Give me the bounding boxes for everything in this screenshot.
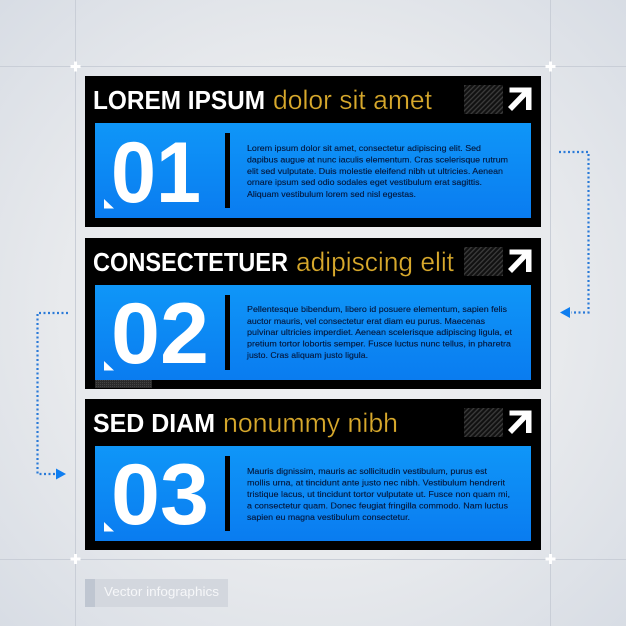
panel 3 heading bbox=[93, 408, 398, 438]
panel 1 body text: Lorem ipsum dolor sit amet, consectetur adipiscing elit. Sed bbox=[247, 143, 481, 153]
panel 1 arrow icon bbox=[508, 88, 532, 111]
panel 2 heading bbox=[93, 247, 455, 277]
panel 2 hatch block bbox=[464, 247, 503, 276]
panel 1 body text: ornare ipsum sed odio sodales eget vestibulum erat sagittis. bbox=[247, 177, 482, 187]
panel 3 body text: mollis urna, at tincidunt ante justo nec nibh. Vestibulum hendrerit bbox=[247, 478, 506, 488]
panel 3 bbox=[85, 399, 541, 550]
panel 2 body text: justo. Cras aliquam justo ligula. bbox=[246, 350, 368, 360]
panel 3 body text: Mauris dignissim, mauris ac sollicitudin vestibulum, purus est bbox=[247, 466, 488, 476]
panel 3 arrow icon bbox=[508, 410, 532, 434]
panel 1 body text bbox=[247, 143, 508, 199]
crop marks bbox=[70, 62, 556, 564]
panel 2 body text bbox=[246, 304, 513, 360]
arrow: dotted connector left bbox=[38, 313, 68, 480]
panel 1 heading bbox=[93, 85, 433, 115]
panel 2 heading: CONSECTETUER bbox=[93, 247, 288, 277]
panel 3 heading: nonummy nibh bbox=[223, 408, 398, 438]
caption label: Vector infographics bbox=[104, 584, 220, 599]
panel 3 heading: SED DIAM bbox=[93, 408, 215, 438]
panel 3 body text: a consectetur quam. Donec feugiat fringilla commodo. Nam luctus bbox=[247, 500, 509, 510]
panel 1 heading: LOREM IPSUM bbox=[93, 85, 265, 115]
panel 3 corner triangle bbox=[104, 522, 114, 532]
panel 3 divider bbox=[225, 456, 230, 531]
panel 2 body text: pulvinar ultricies imperdiet. Aenean scelerisque adipiscing ligula, et bbox=[247, 327, 513, 337]
panel 1 blue box bbox=[95, 123, 531, 218]
panel 2 body text: auctor mauris, vel consectetur erat diam eu purus. Maecenas bbox=[247, 316, 486, 326]
panel 1 corner triangle bbox=[104, 199, 114, 208]
panel 2 arrow icon bbox=[508, 250, 532, 273]
panel 1 number: 01 bbox=[111, 125, 201, 221]
panel 3 number: 03 bbox=[111, 447, 209, 543]
panel 2 bottom hatch strip bbox=[95, 380, 152, 388]
panel 1 body text: Aliquam vestibulum lorem sed nisl egestas. bbox=[247, 189, 416, 199]
panel 3 hatch block bbox=[464, 408, 503, 437]
panel 2 heading: adipiscing elit bbox=[296, 247, 455, 277]
panel 1 divider bbox=[225, 133, 230, 208]
panel 1 body text: dapibus augue at nunc iaculis elementum. Cras scelerisque rutrum bbox=[247, 154, 508, 164]
panel 3 blue box bbox=[95, 446, 531, 541]
arrow: dotted connector right bbox=[559, 152, 588, 318]
panel 3 body text bbox=[247, 466, 510, 522]
panel 1 body text: elit sed vulputate. Duis molestie eleifend nibh ut ultricies. Aenean bbox=[247, 166, 503, 176]
panel 1 hatch block bbox=[464, 85, 503, 114]
panel 2 body text: pretium tortor lobortis semper. Fusce luctus nunc tellus, in pharetra bbox=[247, 338, 511, 348]
panel 2 divider bbox=[225, 295, 230, 370]
panel 2 corner triangle bbox=[104, 361, 114, 370]
panel 3 body text: sapien eu magna vestibulum consectetur. bbox=[247, 512, 410, 522]
panel 1 heading: dolor sit amet bbox=[273, 85, 433, 115]
panel 2 number: 02 bbox=[111, 286, 209, 382]
panel 2 blue box bbox=[95, 285, 531, 380]
panel 1 bbox=[85, 76, 541, 227]
panel 3 body text: tristique lacus, ut tincidunt tortor vulputate ut. Fusce non quam mi, bbox=[247, 489, 510, 499]
panel 2 bbox=[85, 238, 541, 389]
caption label bbox=[85, 579, 228, 607]
panel 2 body text: Pellentesque bibendum, libero id posuere elementum, sapien felis bbox=[247, 304, 508, 314]
